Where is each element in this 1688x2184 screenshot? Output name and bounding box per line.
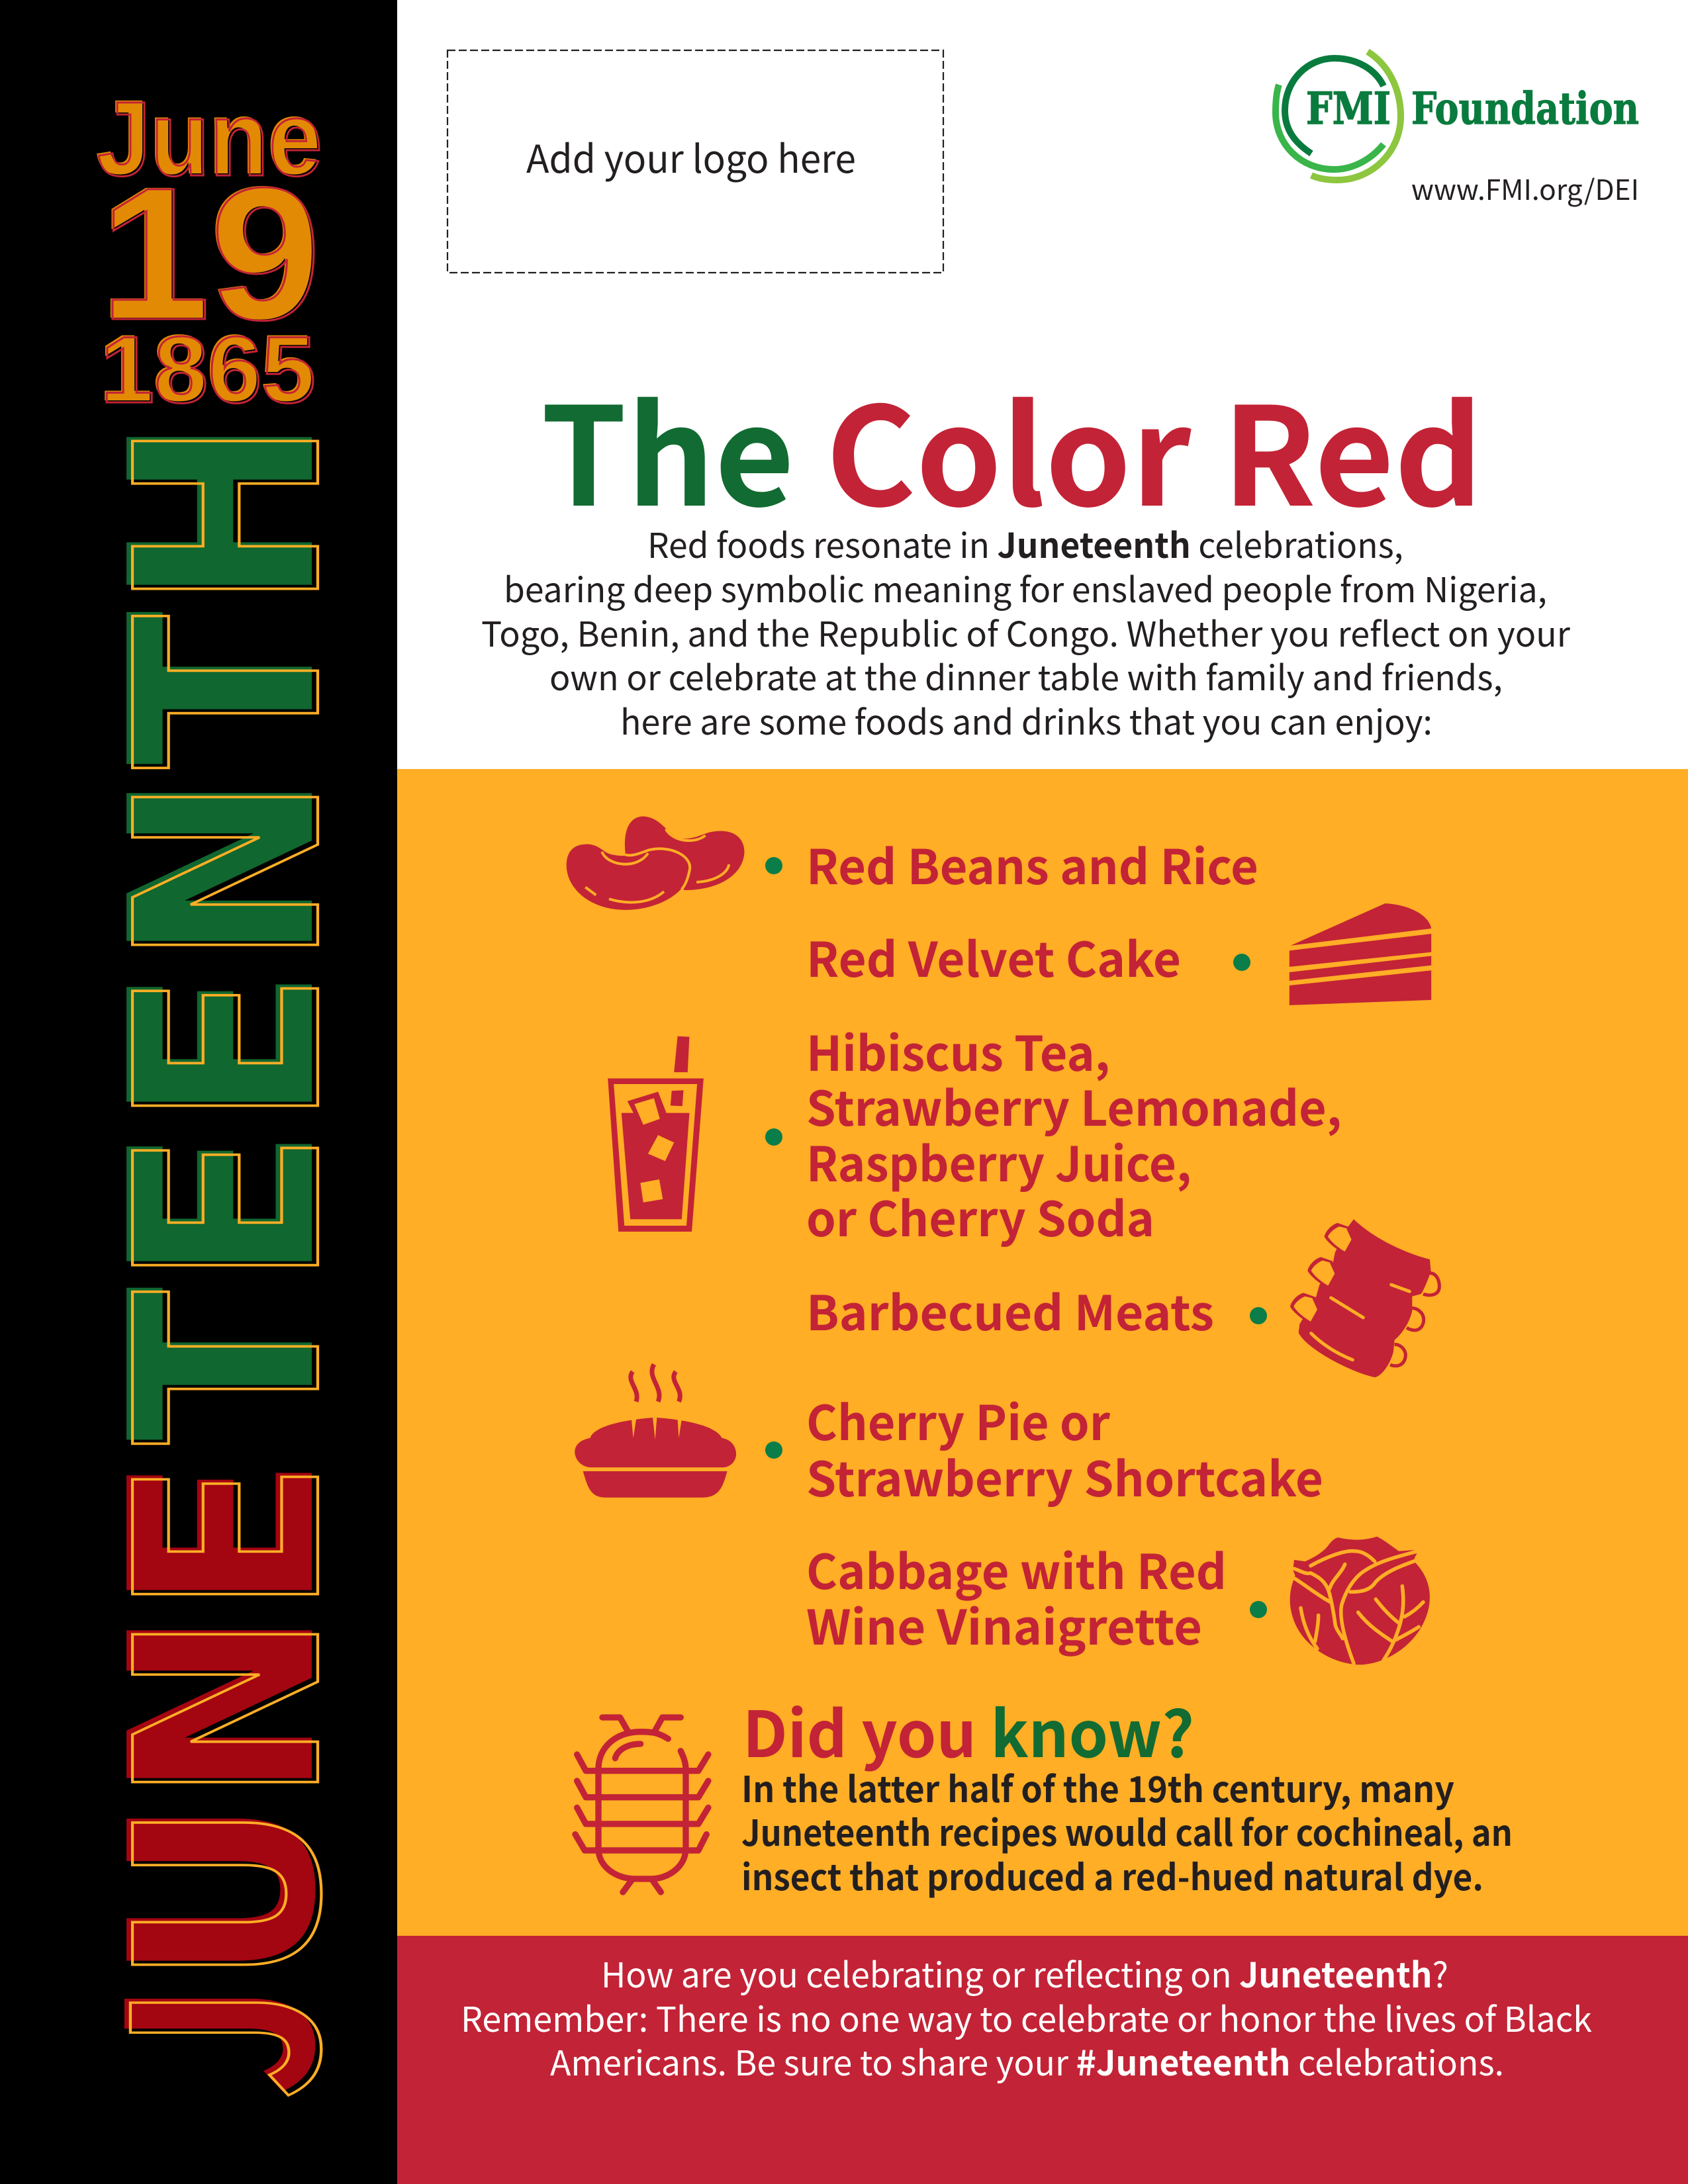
food item: drinks: Strawberry Lemonade, [806, 1070, 1342, 1140]
food item: pie and shortcake [575, 1364, 1323, 1510]
date: June 19 1865: 1865 [101, 318, 316, 423]
date: June 19 1865: 19 [100, 149, 321, 359]
intro paragraph: Togo, Benin, and the Republic of Congo. Whether you reflect on your [481, 607, 1571, 657]
food item: pie and shortcake: Cherry Pie or [806, 1385, 1111, 1454]
title: The Color Red [541, 348, 1483, 545]
food item: red beans and rice: Red Beans and Rice [806, 829, 1258, 898]
intro paragraph [481, 518, 1571, 745]
panel: footer message: Americans. Be sure to share your #Juneteenth celebrations. [550, 2036, 1504, 2085]
intro paragraph: bearing deep symbolic meaning for enslaved people from Nigeria, [504, 563, 1547, 612]
food item: barbecued meats: Barbecued Meats [806, 1275, 1214, 1344]
FMI Foundation logo [1276, 52, 1639, 208]
food item: barbecued meats [806, 1219, 1439, 1377]
food item: drinks [608, 1015, 1342, 1250]
vertical word: JUNETEENTH: E [76, 1456, 372, 1611]
food item: cabbage: Wine Vinaigrette [806, 1589, 1202, 1659]
intro paragraph: Red foods resonate in Juneteenth celebrations, [647, 518, 1403, 568]
date: June 19 1865: 19 [98, 148, 319, 358]
icon: cochineal insect [575, 1717, 708, 1892]
food item: drinks: Hibiscus Tea, [806, 1015, 1110, 1085]
icon: steaming pie [575, 1364, 736, 1498]
intro paragraph: own or celebrate at the dinner table with family and friends, [549, 651, 1503, 700]
vertical word: JUNETEENTH: J [19, 1981, 385, 2096]
callout: did you know: In the latter half of the 19th century, many [741, 1760, 1454, 1813]
icon: beans [567, 816, 745, 910]
icon: cake slice [1289, 903, 1431, 1005]
food item: pie and shortcake: Strawberry Shortcake [806, 1441, 1323, 1510]
food item: cabbage: Cabbage with Red [806, 1533, 1227, 1603]
vertical word: JUNETEENTH: J [24, 1985, 391, 2100]
food item: red beans and rice [567, 816, 1258, 910]
panel: foods list [397, 769, 1688, 1936]
food item: drinks: or Cherry Soda [806, 1181, 1154, 1250]
FMI Foundation logo: FMI [1306, 83, 1391, 134]
date: June 19 1865 [95, 77, 322, 423]
vertical word: JUNETEENTH: UN [76, 1610, 372, 1981]
callout: did you know [575, 1684, 1513, 1901]
food item: cabbage [806, 1533, 1430, 1664]
food item: drinks: Raspberry Juice, [806, 1126, 1192, 1195]
icon: logo rings [1276, 52, 1401, 180]
panel: black sidebar [0, 0, 397, 2184]
icon: ribs [1290, 1219, 1439, 1377]
date: June 19 1865: June [97, 79, 322, 198]
intro paragraph: here are some foods and drinks that you can enjoy: [620, 695, 1432, 745]
panel: footer message: Remember: There is no one way to celebrate or honor the lives of Black [461, 1992, 1592, 2042]
logo placeholder: Add your logo here [526, 128, 856, 184]
vertical word: JUNETEENTH: UNETEENTH [82, 420, 378, 1985]
vertical word: JUNETEENTH: TEENTH [76, 416, 372, 1441]
callout: did you know: insect that produced a red-hued natural dye. [741, 1848, 1483, 1901]
date: June 19 1865: 1865 [99, 316, 314, 421]
callout: did you know: Juneteenth recipes would call for cochineal, an [741, 1804, 1513, 1856]
panel: footer message: How are you celebrating or reflecting on Juneteenth? [601, 1948, 1448, 1997]
FMI Foundation logo: www.FMI.org/DEI [1411, 168, 1639, 208]
logo placeholder [447, 50, 943, 273]
FMI Foundation logo: Foundation [1411, 83, 1639, 134]
food item: red velvet cake [806, 903, 1431, 1005]
food item: red velvet cake: Red Velvet Cake [806, 921, 1181, 991]
callout: did you know: Did you know? [743, 1684, 1194, 1776]
icon: iced drink [608, 1036, 704, 1232]
panel: footer message [397, 1936, 1688, 2184]
date: June 19 1865: June [95, 77, 320, 196]
icon: cabbage [1290, 1537, 1430, 1664]
